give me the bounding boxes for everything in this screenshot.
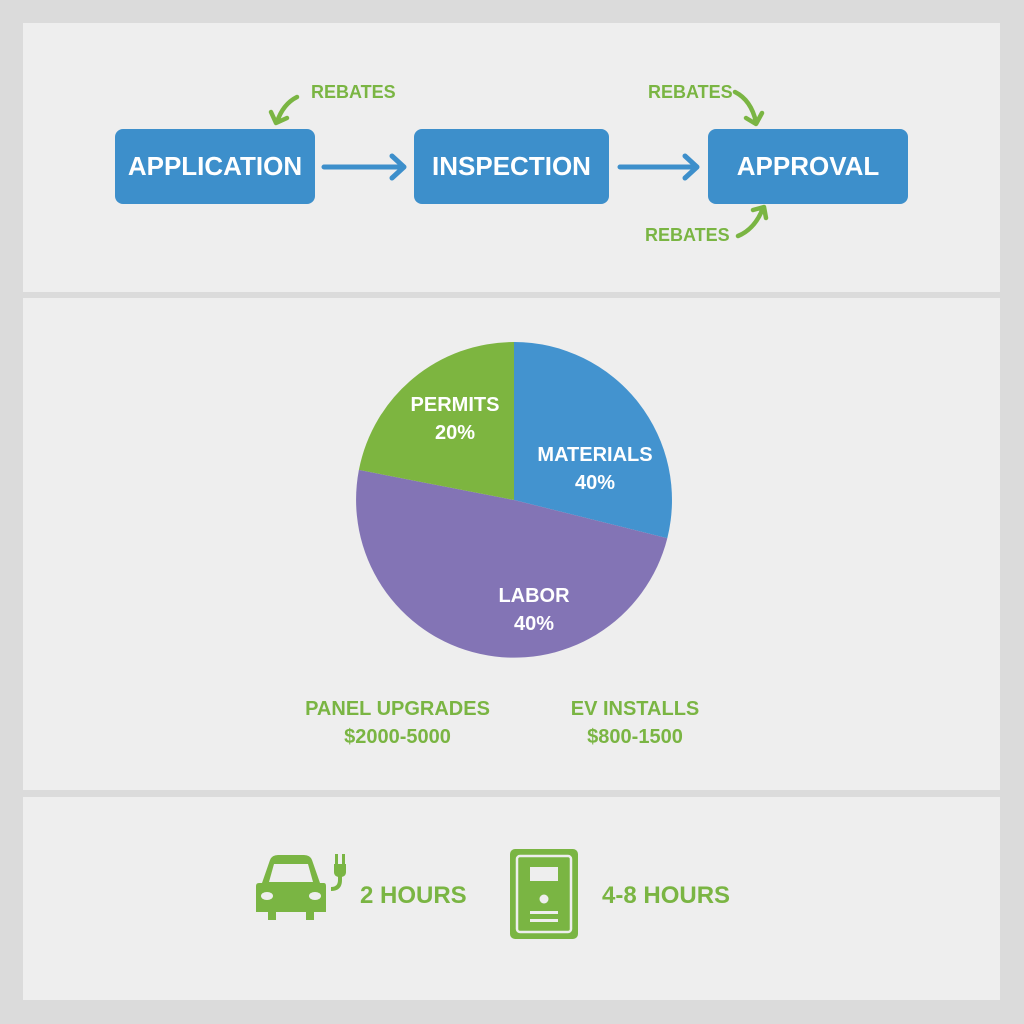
panel: cost breakdown	[23, 298, 1000, 790]
panel: install time	[23, 797, 1000, 1000]
icon: electrical panel	[510, 849, 578, 939]
pie chart: MATERIALS	[537, 444, 653, 466]
box: approval	[708, 129, 908, 204]
box: application: APPLICATION	[128, 151, 302, 181]
box: inspection: INSPECTION	[432, 151, 591, 181]
text: 2 hours: 2 HOURS	[360, 882, 467, 909]
icon: car with plug	[256, 854, 346, 920]
box: application	[115, 129, 315, 204]
pie chart: LABOR	[498, 585, 570, 607]
cost labels: PANEL UPGRADES	[305, 698, 490, 720]
pie chart: 20%	[435, 422, 475, 444]
text: $800-1500	[587, 726, 683, 748]
panel: process flow	[23, 23, 1000, 292]
cost labels: $2000-5000	[344, 726, 451, 748]
cost labels	[305, 698, 490, 748]
pie chart: 40%	[575, 472, 615, 494]
rebates labels: REBATES	[311, 82, 396, 102]
box: approval: APPROVAL	[737, 151, 879, 181]
box: inspection	[414, 129, 609, 204]
pie chart	[356, 342, 672, 658]
pie chart: PERMITS	[411, 394, 499, 416]
pie chart: 40%	[514, 613, 554, 635]
text: REBATES	[645, 225, 730, 245]
arrows and rebate arrows	[268, 90, 768, 238]
text: REBATES	[648, 82, 733, 102]
text: 4-8 hours: 4-8 HOURS	[602, 882, 730, 909]
text: EV INSTALLS	[571, 698, 699, 720]
